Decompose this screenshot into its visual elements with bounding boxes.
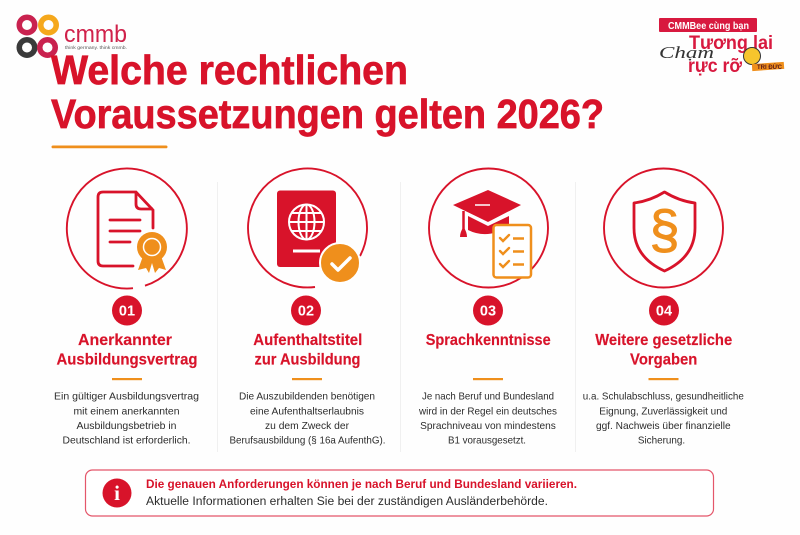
heading (595, 332, 733, 368)
number badge 03 (473, 296, 503, 326)
heading: Vorgaben (630, 352, 697, 368)
body text (418, 392, 557, 446)
accent line (112, 378, 142, 380)
body text: Sicherung. (638, 436, 685, 446)
body text: Deutschland ist erforderlich. (62, 436, 190, 446)
heading (56, 332, 198, 368)
number badge 01: 01 (119, 304, 135, 320)
heading: Ausbildungsvertrag (56, 352, 198, 368)
heading (253, 332, 362, 368)
logo: CMMBee campaign: rực rỡ (688, 55, 742, 77)
logo: CMMBee campaign: Chạm (659, 43, 714, 62)
number badge 04: 04 (656, 304, 672, 320)
number badge 01 (112, 296, 142, 326)
title: Welche rechtlichen (51, 47, 408, 93)
callout text (146, 479, 577, 508)
accent line (473, 378, 503, 380)
body text: ggf. Nachweis über finanzielle (596, 421, 731, 432)
logo: cmmb (19, 17, 127, 55)
icon: shield with paragraph sign: § (649, 200, 680, 260)
body text: Ein gültiger Ausbildungsvertrag (54, 392, 199, 402)
body text: zu dem Zweck der (265, 421, 350, 432)
logo: CMMBee campaign (659, 18, 784, 77)
panel: Aufenthaltstitel zur Ausbildung (230, 168, 386, 446)
body text: eine Aufenthaltserlaubnis (250, 406, 364, 418)
number badge 03: 03 (480, 304, 496, 320)
body text: Die Auszubildenden benötigen (239, 392, 375, 402)
title (51, 47, 604, 137)
body text: Eignung, Zuverlässigkeit und (599, 406, 728, 418)
panel: Weitere gesetzliche Vorgaben (583, 168, 744, 446)
body text: Je nach Beruf und Bundesland (422, 392, 554, 402)
icon: passport with check (248, 168, 367, 287)
icon: info (102, 478, 132, 508)
body text: Berufsausbildung (§ 16a AufenthG). (230, 436, 386, 446)
logo: CMMBee campaign: TRI ĐỨC (757, 64, 783, 71)
panel: Anerkannter Ausbildungsvertrag (54, 169, 199, 447)
icon: graduation cap with checklist (429, 168, 548, 288)
logo: cmmb: think germany. think cmmb. (65, 45, 127, 50)
accent line (292, 378, 322, 380)
icon: shield with paragraph sign (604, 168, 723, 288)
accent line (648, 378, 678, 380)
callout: notice (86, 470, 714, 516)
heading: Aufenthaltstitel (253, 332, 362, 349)
logo: CMMBee campaign: Tương lai (689, 32, 773, 54)
number badge 04 (649, 296, 679, 326)
title underline (52, 146, 168, 148)
callout text: Die genauen Anforderungen können je nach Beruf und Bundesland variieren. (146, 479, 577, 491)
number badge 02 (291, 296, 321, 326)
heading: zur Ausbildung (254, 352, 360, 368)
heading: Weitere gesetzliche (595, 332, 733, 349)
icon: info: i (114, 481, 120, 505)
body text: wird in der Regel ein deutsches (418, 406, 557, 418)
heading: Anerkannter (78, 332, 172, 349)
body text (583, 392, 744, 446)
logo: cmmb: cmmb (64, 21, 127, 48)
logo: CMMBee campaign: CMMBee cùng bạn (668, 21, 749, 32)
title: Voraussetzungen gelten 2026? (51, 91, 604, 137)
panel: Sprachkenntnisse (418, 168, 557, 446)
body text: u.a. Schulabschluss, gesundheitliche (583, 392, 744, 402)
body text (54, 392, 199, 446)
body text: B1 vorausgesetzt. (448, 436, 526, 446)
body text: Sprachniveau von mindestens (420, 421, 556, 432)
icon: contract with seal (67, 169, 187, 289)
callout text: Aktuelle Informationen erhalten Sie bei der zuständigen Ausländerbehörde. (146, 496, 548, 508)
body text: Ausbildungsbetrieb in (76, 421, 176, 432)
body text: mit einem anerkannten (74, 406, 180, 418)
number badge 02: 02 (298, 304, 314, 320)
heading: Sprachkenntnisse (426, 332, 551, 349)
body text (230, 392, 386, 446)
